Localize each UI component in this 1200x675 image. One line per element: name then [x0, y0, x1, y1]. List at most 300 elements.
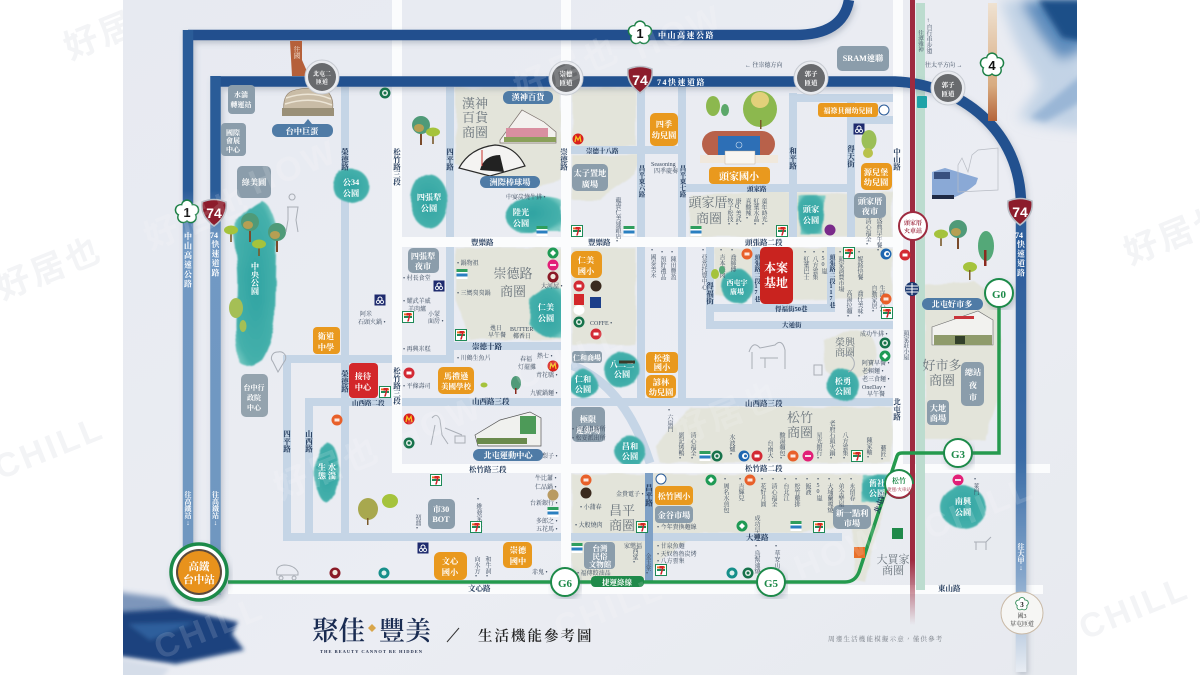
business district names: 大買家 — [876, 552, 910, 566]
pill: 洲際棒球場: 洲際棒球場 — [490, 177, 530, 187]
vertical shop lists: •清心福全 — [770, 477, 777, 507]
station: 高鐵台中站: 高鐵 — [188, 560, 210, 573]
park names: 松勇 — [835, 376, 851, 386]
small shop labels: • 大股燒肉 — [575, 521, 603, 529]
highway 74: 74快速道路 — [215, 76, 1021, 672]
small shop labels: • 松安派出所 — [572, 434, 606, 442]
park names: 公園 — [421, 203, 437, 213]
national freeway 3 marker: 草屯匝道 — [1010, 620, 1034, 628]
road names: 得福街50巷 — [775, 304, 808, 313]
small shop labels: 面房 • — [428, 317, 444, 325]
road names: 北屯路 — [871, 490, 888, 515]
highway labels: 74快速道路 — [657, 77, 706, 87]
grey landmark labels: 文物館 — [589, 559, 612, 569]
title block: 豐美 — [379, 617, 431, 646]
station: G5 — [757, 568, 785, 596]
paper map panel — [123, 0, 1077, 675]
park names: 公園 — [538, 313, 554, 323]
road names: 崇德路 — [559, 147, 568, 172]
station: G5: G5 — [764, 578, 779, 590]
road names: 崇德十路 — [472, 341, 502, 351]
vertical shop lists: 真酸辣• — [744, 197, 751, 222]
grey landmark labels: 轉運站 — [230, 100, 252, 109]
park names — [250, 177, 973, 517]
small shop labels: 赤鬼 • — [532, 568, 548, 576]
faint watermark outside the map: CHILL — [1074, 569, 1195, 647]
map watermark: CHILL — [149, 589, 270, 667]
vertical shop lists: 生活中心• — [878, 284, 885, 315]
illustration: Intercontinental baseball stadium — [459, 145, 525, 176]
direction notes: 往潭雅神 — [917, 29, 924, 53]
illustration: MRT train — [932, 148, 998, 199]
grey landmark labels: 夜市 — [862, 207, 878, 216]
illustration: Hanshin department store — [500, 110, 556, 143]
vertical shop lists: •吉本燒肉 — [718, 248, 725, 279]
grey landmark labels: 金谷市場 — [658, 510, 690, 520]
map watermark — [139, 0, 1040, 667]
shield: route 74 left — [202, 200, 226, 226]
illustration: Taichung dome 台中巨蛋 — [282, 88, 334, 124]
highway labels: 快速道路 — [210, 239, 220, 278]
station: 頭家厝 — [899, 212, 927, 240]
vertical shop lists: 童年時光• — [760, 197, 767, 228]
vertical shop lists: 康Q美武• — [734, 197, 741, 228]
business district names — [462, 96, 962, 577]
vertical shop lists: •永留春 — [848, 477, 855, 502]
map watermark: 好居也 — [669, 376, 786, 452]
shield: national freeway 4: 4 — [988, 58, 996, 73]
road names: 得天街 — [846, 144, 856, 169]
small shop labels: • 小蒲春 — [580, 503, 602, 511]
park names: 四張犁 — [417, 192, 441, 202]
road names — [282, 144, 961, 593]
map watermark: CHILL — [509, 319, 630, 397]
road names: 山西路 — [304, 429, 314, 454]
road names: 頭張路二段 — [745, 237, 783, 247]
access road tan strip 往國: 往國 — [292, 45, 300, 60]
grey landmark labels: 國際 — [226, 128, 241, 137]
park names: 公34 — [343, 177, 359, 187]
shield: route 74 right — [1008, 198, 1032, 225]
orange school labels: 國小 — [654, 363, 671, 372]
small shop labels: 椰香日 — [513, 332, 531, 340]
park names: 廣場 — [730, 287, 744, 296]
red railway line — [910, 0, 915, 625]
orange school labels — [313, 103, 892, 580]
vertical shop lists: 初鼎• — [414, 513, 421, 532]
panel: main white roads — [228, 0, 1050, 594]
small shop labels: 灯擺攤 — [518, 363, 536, 371]
business district names: 商圈 — [835, 346, 855, 359]
road 4 tan strip — [988, 3, 997, 121]
road names: 四平路 — [445, 148, 454, 172]
pill: 捷運綠線 — [591, 576, 644, 587]
interchange: 郭子 west: 匝道 — [804, 78, 818, 87]
grey landmark labels: 水湍 — [234, 90, 248, 99]
road names: 豐樂路 — [588, 237, 611, 247]
direction notes — [745, 18, 963, 69]
small shop labels: 老三食麵 • — [862, 375, 890, 383]
orange school labels: 衛道 — [318, 331, 334, 341]
interchange: 崇德: 崇德 — [560, 69, 573, 78]
vertical shop lists: 自動家居• — [870, 284, 877, 315]
small shop labels: • 再興米糕 — [403, 345, 432, 353]
business district names: 松竹 — [787, 410, 813, 425]
orange school labels: 幼兒園 — [649, 387, 673, 397]
road names: 松竹路三段 — [392, 366, 402, 406]
park names: 公園 — [575, 384, 591, 394]
grey landmark labels: 政院 — [247, 393, 261, 402]
national freeway 3 marker: 3 — [1020, 601, 1024, 609]
brand icons — [330, 88, 964, 578]
vertical shop lists: •萊門 — [972, 477, 979, 495]
vertical shop lists: 成功早頓 — [753, 514, 760, 540]
road names: 崇德十八路 — [586, 146, 619, 155]
small shop labels: BUTTER — [510, 327, 533, 333]
direction notes: 往太平方向 → — [925, 61, 963, 69]
park names: 仁和 — [575, 374, 591, 384]
small shop labels: • 村長食堂 — [403, 274, 431, 282]
road names: 大通街 — [782, 320, 802, 329]
small shop labels: 牛比蕭 • — [535, 474, 557, 482]
title block: 生活機能參考圖 — [478, 627, 594, 645]
park names: 公園 — [803, 215, 819, 225]
small shop labels: COFFE • — [590, 321, 612, 327]
vertical shop lists: 水波爐• — [728, 433, 735, 458]
highway labels: 往高鐵站↓ — [212, 490, 220, 527]
small shop labels: • 三媽臭臭鍋 — [457, 289, 491, 297]
vertical shop lists: 星光銀行• — [815, 431, 822, 462]
small shop labels: 羊肉爐 — [408, 305, 426, 313]
vertical shop lists: •弟全樂屋 — [837, 477, 844, 508]
station: 松竹: 捷運/火車站 — [887, 486, 911, 493]
map watermark: HOW — [389, 388, 488, 457]
pill: 北屯好市多: 北屯好市多 — [932, 299, 972, 309]
small shop labels: • 平條壽司 — [403, 382, 431, 390]
small shop labels: 台新銀行 • — [530, 499, 558, 507]
vertical shop lists: 金玉棠• — [644, 552, 651, 577]
interchange: 郭子 east: 匝道 — [942, 89, 955, 98]
vertical shop lists: 劉記烤鴨• — [677, 431, 684, 462]
highway labels: 往大甲↓ — [1017, 542, 1025, 572]
road names: 松竹路三段 — [469, 464, 507, 474]
small shop labels: • 川鶴生魚片 — [457, 354, 491, 362]
small shop labels: 梨子 • — [542, 452, 558, 460]
vertical shop lists: 向水方• — [473, 555, 480, 580]
MRT green line — [228, 296, 999, 582]
grey landmark labels: 市 — [969, 393, 977, 402]
grey landmark labels: 仁和商場 — [573, 353, 601, 362]
map watermark: 好居也 — [509, 31, 626, 107]
vertical shop lists: •國泰美禾 — [649, 248, 656, 279]
small shop labels: 大河屋 • — [541, 282, 563, 290]
highway labels: 74 — [210, 231, 218, 240]
small shop labels: • 甘泉魚麵 — [657, 542, 685, 550]
vertical shop lists: 龍貴仁美連鎖店• — [614, 196, 621, 245]
vertical shop lists: •妮銘快餐 — [856, 250, 863, 281]
pill: 漢神百貨 — [503, 91, 553, 104]
grey landmark labels: 中心 — [247, 403, 262, 412]
business district names: 商圈 — [696, 211, 722, 226]
business district names: 商圈 — [462, 125, 488, 140]
grey landmark labels: 民俗 — [592, 551, 608, 561]
business district names: 好市多 — [922, 358, 962, 373]
vertical shop lists: •預貯禮品 — [659, 250, 666, 281]
station: 松竹 — [885, 470, 913, 498]
orange school labels: 幼兒園 — [864, 177, 888, 187]
national freeway 3 marker — [1001, 592, 1043, 634]
small shop labels: 九號鍋麵 • — [530, 389, 558, 397]
park names: 生態 — [317, 462, 326, 480]
vertical shop lists: 陳家軸• — [865, 436, 872, 461]
pill: 台中巨蛋: 台中巨蛋 — [286, 126, 319, 136]
vertical shop lists: •陳田豐盈 — [669, 250, 676, 280]
small shop labels: 老賴麵 • — [862, 367, 884, 375]
park names: 南興 — [955, 496, 973, 506]
grey landmark labels: 總站 — [965, 367, 981, 377]
vertical shop lists: 清心福全• — [689, 431, 696, 462]
small shop labels: 家樂福 — [624, 542, 642, 550]
business district names: 商圈 — [500, 284, 526, 299]
highway labels: 往高鐵站↓ — [184, 490, 192, 527]
road names: 榮德路 — [340, 369, 350, 394]
illustration: 北屯運動中心 — [475, 412, 541, 446]
grey landmark labels: 大地 — [930, 403, 946, 413]
small shop labels: 多郎之 • — [536, 517, 558, 525]
interchange: 崇德 — [549, 61, 583, 95]
grey landmark labels: BOT — [432, 515, 450, 524]
pill: 漢神百貨: 漢神百貨 — [512, 92, 546, 102]
title block: THE BEAUTY CANNOT BE HIDDEN — [320, 649, 423, 654]
station: G0 — [985, 279, 1013, 307]
vertical shop lists: 牧子松技• — [726, 197, 733, 228]
small shop labels: • 耀武羊威 — [403, 297, 431, 305]
vertical shop lists: 盛典早午餐• — [875, 217, 882, 254]
grey landmark labels: 夜市 — [415, 262, 431, 271]
national freeway 3 marker: 國3 — [1017, 612, 1027, 620]
interchange: 北屯二: 北屯二 — [313, 70, 331, 78]
park names: 公園 — [835, 386, 851, 396]
station: 松竹: 松竹 — [892, 476, 906, 485]
map watermark: HOW — [244, 133, 343, 202]
small shop labels: 四季慶奏 — [654, 167, 678, 175]
vertical shop lists: •頭家消費市場 — [837, 250, 844, 293]
orange school labels: 馬禮遜 — [444, 371, 469, 381]
small shop labels: 石頭火鍋 • — [358, 318, 386, 326]
road names: 四平路 — [282, 430, 292, 454]
park names: 公園 — [622, 451, 638, 461]
small shop labels: 阿米 — [360, 310, 372, 318]
orange school labels: 四季 — [656, 119, 673, 129]
road names: 頭張路二段17巷 — [753, 253, 760, 302]
interchange: 郭子 west: 郭子 — [804, 69, 818, 78]
park names: 頭家 — [803, 204, 819, 214]
road names: 大連路 — [746, 532, 769, 542]
business district names: 昌平 — [609, 503, 635, 518]
access road tan strip 往國 — [290, 41, 309, 76]
vertical shop lists: 老府石頭火鍋• — [828, 419, 835, 462]
small shop labels: 春福 — [520, 355, 532, 363]
orange school labels: 頭家國小 — [719, 170, 760, 183]
small shop labels: 仁品鍋 • — [535, 483, 557, 491]
shield: route 74 top: 74 — [632, 72, 648, 88]
road names: 山西路三段 — [745, 398, 783, 408]
interchange: 郭子 east: 郭子 — [942, 80, 955, 89]
line art figures — [271, 194, 991, 580]
business district names: 百貨 — [462, 110, 489, 125]
vertical shop lists: •花好月圓 — [759, 477, 766, 508]
small shop labels: 五花馬 • — [536, 525, 558, 533]
road names: 山西路二段 — [352, 398, 385, 407]
brush stroke: top right — [1000, 0, 1085, 130]
interchange: 郭子 east — [931, 71, 965, 105]
orange school labels: 幼兒園 — [652, 130, 676, 140]
interchange: 崇德: 匝道 — [560, 78, 573, 87]
panel: secondary roads in light blue — [283, 87, 893, 583]
small shop labels: 早午餐 — [867, 390, 885, 398]
shield: national freeway 1 top: 1 — [636, 26, 644, 41]
map watermark: 好居也 — [269, 431, 386, 507]
park names: 八二三 — [610, 360, 634, 369]
vertical shop lists: •50嵐 — [815, 477, 822, 502]
station: G6 — [551, 568, 579, 596]
shield: route 74 top — [628, 66, 652, 93]
vertical shop lists: •吉輝兒 — [737, 477, 744, 502]
vertical shop lists: 紅葉水晶• — [752, 197, 759, 228]
small shop labels: • 天奴魯魯炭烤 — [657, 550, 697, 558]
highway labels — [182, 30, 1026, 572]
shield: national freeway 1 left — [175, 199, 199, 223]
business district names: 商圈 — [787, 425, 813, 440]
grey landmark labels: 市30 — [433, 505, 449, 514]
orange school labels: 國中 — [510, 556, 526, 566]
road names: 昌平東七路 — [678, 164, 686, 199]
grey landmark labels: 夜 — [969, 381, 977, 390]
park names: 昌和 — [622, 441, 638, 451]
vertical shop lists — [414, 196, 979, 580]
road names: 得福街 — [705, 281, 714, 306]
small shop labels: 熱七 • — [537, 352, 553, 360]
map watermark: CHILL — [919, 469, 1040, 547]
small shop labels: OneDay • — [862, 385, 886, 391]
park names: 舊社 — [869, 478, 885, 488]
sales centre: 接待中心 — [349, 363, 378, 398]
orange school labels: 諺林 — [653, 377, 670, 387]
shield: national freeway 4 — [980, 52, 1004, 76]
vertical shop lists: •八方雲集 — [811, 250, 818, 281]
road names: 和平路 — [788, 146, 798, 171]
park names: 中央公園 — [250, 261, 260, 296]
grey landmark labels — [221, 46, 984, 569]
shield: national freeway 1 left: 1 — [183, 205, 191, 220]
project site: 本案基地: 本案 — [764, 260, 788, 275]
station: G3 — [944, 439, 972, 467]
small shop labels: 金貴電子 • — [616, 490, 644, 498]
vertical shop lists: 西望• — [631, 547, 638, 566]
road names: 榮德路 — [340, 147, 350, 172]
project site: 本案基地 — [760, 247, 793, 304]
sales centre: 接待中心: 中心 — [355, 382, 373, 392]
shield: route 74 right: 74 — [1012, 204, 1028, 220]
small shop labels: Seasoning — [651, 162, 676, 168]
panel: railway green strip — [916, 3, 925, 590]
highway labels: 中山高速公路 — [182, 231, 192, 289]
interchange: 北屯二 — [305, 60, 339, 94]
park names: 陸光 — [513, 207, 529, 217]
park names: 公園 — [614, 369, 630, 379]
vertical shop lists: 八方雲集• — [841, 431, 848, 462]
vertical label on rail strip: 頭家莊小屋 — [902, 329, 909, 361]
title block — [312, 616, 594, 654]
small shop labels: 早午餐 — [488, 331, 506, 339]
road names: 頭家路 — [747, 184, 767, 193]
grey landmark labels: 商場 — [930, 413, 946, 423]
orange school labels: 中學 — [318, 342, 334, 352]
vertical shop lists: •松竹雞排 — [793, 477, 800, 508]
business district names: 榮興 — [835, 336, 856, 349]
pill: 北屯運動中心: 北屯運動中心 — [483, 450, 534, 460]
icon: railway logo — [905, 282, 919, 296]
station: G6: G6 — [558, 578, 573, 590]
orange school labels: 崇德 — [510, 545, 527, 555]
vertical shop lists: 喬任美味• — [856, 289, 863, 320]
park names: 仁美 — [538, 302, 555, 312]
park names: 公園 — [343, 188, 359, 198]
vertical shop lists: •大埔蘭嘎燒 — [826, 477, 833, 514]
illustration: 頭家國小 campus and track — [700, 131, 778, 164]
road names: 文心路 — [468, 583, 491, 593]
small shop labels: • 福傳餃油品 — [577, 569, 611, 577]
road names: 頭張路二段117巷 — [828, 253, 835, 308]
orange school labels: 仁美 — [578, 255, 595, 265]
orange school labels: 源兒堡 — [864, 167, 889, 177]
shield: national freeway 1 top — [628, 20, 652, 44]
grey landmark labels: 太子置地 — [574, 168, 606, 178]
orange school labels: 國小 — [578, 267, 595, 276]
business district names: 頭家厝 — [688, 195, 728, 210]
station: 高鐵台中站: 台中站 — [183, 573, 215, 586]
orange school labels: 松強 — [654, 353, 671, 363]
direction notes: ← 往崇德方向 — [745, 61, 783, 69]
small shop labels: 逸日 — [490, 324, 502, 332]
highway labels: 中山高速公路 — [658, 30, 715, 40]
vertical shop lists: •亞當托嬰中心 — [700, 248, 707, 290]
road names: 豐樂路 — [471, 237, 494, 247]
business district names: 漢神 — [462, 96, 488, 111]
grey landmark labels: 市場 — [844, 518, 860, 528]
grey landmark labels: 廣場 — [582, 179, 598, 189]
business district names: 商圈 — [929, 373, 955, 388]
map watermark: CHILL — [549, 569, 670, 647]
title block: 聚佳 — [312, 616, 365, 646]
vertical shop lists: •喬師傅 — [729, 248, 736, 273]
panel: business district blobs — [456, 88, 1000, 583]
grey landmark labels: 頭家厝 — [858, 196, 882, 206]
vertical shop lists: 高湯拉麵• — [845, 289, 852, 320]
road names: 中山路 — [892, 147, 902, 172]
small shop labels: 小蒙 — [428, 310, 440, 318]
park names: 公園 — [869, 488, 885, 498]
vertical shop lists: •周名水煎包 — [722, 477, 729, 513]
grey landmark labels: 運動場 — [576, 425, 600, 435]
vertical shop lists: •台北江 — [782, 477, 789, 502]
direction notes: ↑自行車步道 — [925, 18, 932, 55]
road names: 松竹路三段 — [392, 147, 402, 187]
vertical shop lists: •50嵐 — [820, 250, 827, 275]
small shop labels: • 八方雲集 — [657, 557, 685, 565]
road names: 昌平路 — [644, 484, 654, 508]
grey landmark labels: 新一點利 — [836, 508, 868, 518]
